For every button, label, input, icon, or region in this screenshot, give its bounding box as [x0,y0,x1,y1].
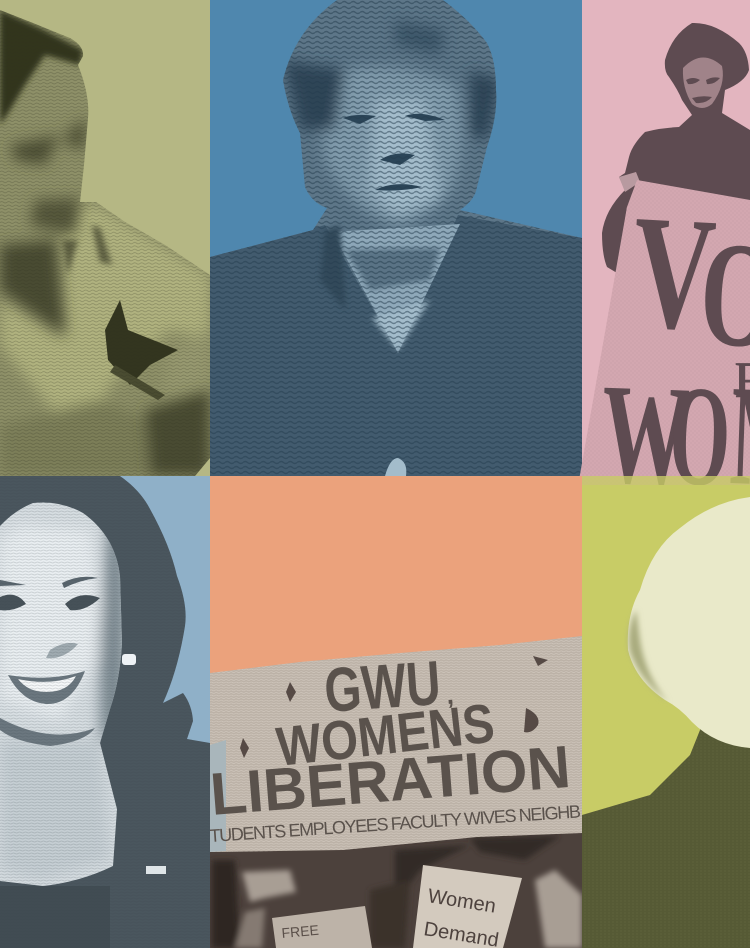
sign: Women Demand [413,865,522,948]
hair [628,497,750,748]
sign words [599,182,750,518]
pin [146,866,166,874]
facial features [686,77,720,103]
brows [0,577,98,588]
banner text: LIBERATION [208,733,573,828]
sign words: W [599,354,692,515]
sign: Free: FREE [281,922,319,941]
jacket highlights [582,725,750,948]
banner text: GWU [322,648,443,725]
hair and jacket [0,476,210,948]
figure [0,0,210,476]
body and head [602,23,750,273]
panel: woman in dark jacket [210,0,582,476]
panel: protest banner [208,476,582,948]
panel: woman in olive blouse [0,0,210,476]
sign words: O [667,355,733,516]
blouse dark fold [105,300,178,385]
smile [8,671,85,704]
jacket [582,725,750,948]
crowd [210,825,582,948]
banner [210,636,582,852]
sign [578,180,750,486]
eyes, nose, mouth [343,114,445,191]
jawline [0,718,95,746]
sign: Women Demand: Women [426,885,497,918]
hand [619,172,640,192]
banner spots [240,656,548,758]
face [683,57,723,108]
sign: Free [272,906,372,948]
face and neck [0,502,122,886]
banner text: WOMENS [273,691,497,778]
figure [210,0,582,476]
banner texture [210,636,582,852]
neck V [332,224,460,353]
banner text: , [445,680,455,710]
hair edge shading [629,610,668,702]
panel: suffragette with sign [578,0,750,518]
panel: woman with pale hair [582,476,750,948]
jacket [210,215,582,476]
sign words: V [628,182,719,365]
sign overlap strip [582,476,750,485]
panel: smiling woman with dark hair [0,476,210,948]
earring [122,654,136,665]
banner left fade [210,740,226,852]
banner text [208,648,581,846]
nose [46,643,78,658]
banner text: TUDENTS EMPLOYEES FACULTY WIVES NEIGHB [209,801,581,846]
button [385,458,406,476]
eyes [0,595,100,610]
teeth [18,676,76,692]
